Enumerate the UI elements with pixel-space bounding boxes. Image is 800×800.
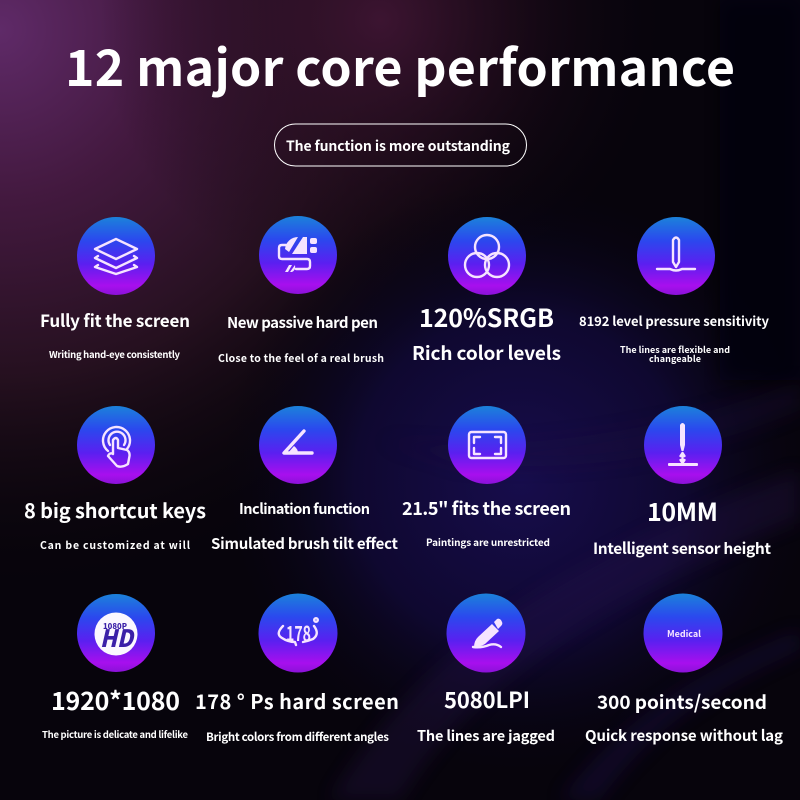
icon: medical badge: Medical [667,627,701,640]
panel: 8192 level pressure sensitivity [579,217,770,365]
panel: 120% sRGB: 120%SRGB [419,299,554,335]
panel: 21.5 inch screen [402,406,571,549]
panel: 5080LPI: The lines are jagged [417,725,555,746]
panel: 8192 level pressure sensitivity: 8192 level pressure sensitivity [579,311,770,330]
panel: inclination function: Inclination function [239,498,370,519]
panel: 300 points per second: Quick response without lag [585,725,783,746]
icon: overlapping colour circles [448,217,526,295]
icon: pen on surface [637,217,715,295]
panel: 10MM sensor height: Intelligent sensor height [593,537,771,559]
panel: 178 degree screen: Bright colors from different angles [206,729,389,745]
panel: 10MM sensor height [593,406,771,559]
panel: inclination function: Simulated brush tilt effect [211,533,399,554]
panel: new passive hard pen: Close to the feel of a real brush [218,351,384,366]
panel: inclination function [211,406,399,554]
panel: 21.5 inch screen: 21.5" fits the screen [402,495,571,521]
panel: 1920*1080 [42,594,188,741]
panel: 5080LPI [417,594,555,746]
panel: 300 points per second [585,594,783,746]
icon: pen nib and stroke [259,216,337,294]
panel: new passive hard pen: New passive hard pen [227,312,378,333]
panel: 300 points per second: 300 points/second [597,688,767,715]
icon: 178 degree rotation [258,594,338,672]
panel: 5080LPI: 5080LPI [444,683,530,715]
panel: 1920*1080: The picture is delicate and lifelike [42,727,188,741]
panel: 1920*1080: 1920*1080 [51,682,180,718]
subtitle pill: The function is more outstanding [286,136,511,156]
panel: 178 degree screen: 178 ° Ps hard screen [195,686,399,715]
panel: 8192 level pressure sensitivity: changeable [649,352,701,365]
panel: 21.5 inch screen: Paintings are unrestricted [426,534,550,549]
panel: fully fit the screen: Writing hand-eye consistently [49,347,181,361]
icon: HD badge: 1080P [103,621,127,632]
panel: fully fit the screen [40,217,190,361]
title: 12 major core performance [65,29,735,101]
icon: HD badge [77,594,155,672]
icon: touch hand [77,406,155,484]
icon: screen frame [448,406,526,484]
icon: pen writing [446,594,526,672]
panel: fully fit the screen: Fully fit the screen [40,307,190,332]
subtitle pill [274,124,526,166]
panel: new passive hard pen [218,216,384,366]
panel: 8192 level pressure sensitivity: The lines are flexible and [620,343,730,356]
panel: 120% sRGB [412,217,561,366]
panel: 10MM sensor height: 10MM [647,493,718,529]
icon: 178 degree rotation: 178 [286,618,311,648]
panel: 8 big shortcut keys: Can be customized at will [40,538,191,553]
panel: 120% sRGB: Rich color levels [412,339,561,366]
icon: tilt angle [259,406,337,484]
panel: 8 big shortcut keys [24,406,206,553]
icon: medical badge [644,594,722,672]
icon: stacked layers [77,217,155,295]
icon: pen height [644,406,722,484]
panel: 178 degree screen [195,594,399,745]
icon: HD badge: HD [100,619,136,654]
panel: 8 big shortcut keys: 8 big shortcut keys [24,495,206,524]
